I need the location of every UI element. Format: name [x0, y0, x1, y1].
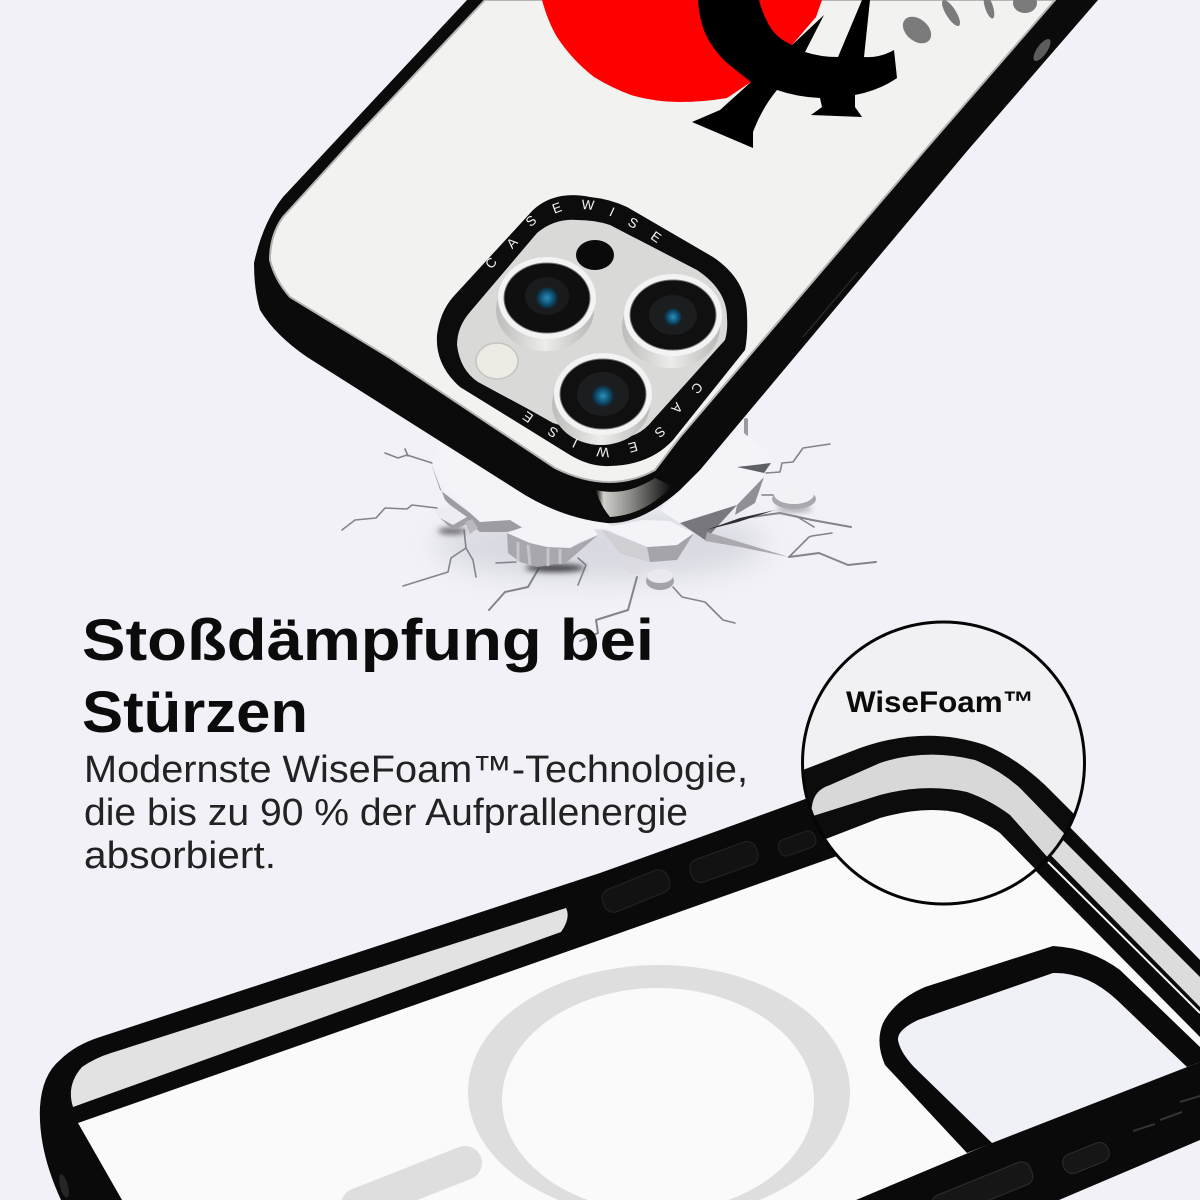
rock: left chunk [507, 527, 598, 572]
black figure artwork [692, 0, 897, 148]
CASEWISE lettering lower: E [627, 439, 639, 455]
CASEWISE lettering upper: S [625, 214, 641, 232]
lens top left [496, 257, 596, 351]
CASEWISE lettering lower: A [668, 400, 686, 416]
CASEWISE lettering lower: C [688, 379, 706, 397]
crack lines [342, 420, 876, 641]
case outer frame [254, 0, 1098, 523]
soft ground shadow [435, 509, 765, 581]
CASEWISE lettering lower [520, 379, 706, 460]
magnifier callout: WiseFoam [801, 620, 1086, 906]
right slab [660, 430, 789, 557]
magsafe alignment pill [358, 1163, 465, 1200]
bottom side buttons [929, 1140, 1112, 1200]
heading: Stürzen [82, 680, 308, 745]
CASEWISE lettering upper [482, 197, 664, 272]
foam strip right [1030, 817, 1200, 1007]
body text [84, 749, 748, 877]
black frame silhouette [40, 745, 1200, 1200]
camera cutout opening [898, 973, 1187, 1143]
lens right [622, 274, 722, 368]
microphone hole [576, 240, 614, 270]
CASEWISE lettering upper: E [550, 199, 564, 217]
CASEWISE lettering lower: W [596, 444, 610, 460]
CASEWISE lettering lower: S [652, 423, 668, 441]
rock: small left [435, 505, 478, 534]
left cliff [431, 463, 523, 532]
rock: bottom small [624, 563, 674, 590]
bumper texture [1133, 1096, 1200, 1131]
callout label: WiseFoam™ [846, 686, 1034, 719]
white back panel [270, 0, 1055, 482]
magnifier background [802, 622, 1084, 904]
CASEWISE lettering upper: S [523, 212, 539, 230]
white highlight beside foam [1048, 862, 1200, 1013]
CASEWISE lettering lower: S [545, 423, 561, 441]
CASEWISE lettering upper: C [482, 254, 500, 272]
CASEWISE lettering upper: A [503, 235, 521, 251]
grey pebbles [898, 0, 1037, 49]
body text: Modernste WiseFoam™-Technologie, [84, 749, 748, 791]
body text: die bis zu 90 % der Aufprallenergie [84, 792, 688, 834]
rock: right floating [772, 484, 816, 512]
magnified frame detail [804, 736, 1074, 868]
camera island [437, 195, 747, 466]
CASEWISE lettering upper: E [648, 228, 664, 246]
CASEWISE lettering lower: I [570, 435, 580, 451]
clear back panel [78, 820, 1200, 1200]
clear case interior view [40, 745, 1200, 1200]
red circle artwork [542, 0, 822, 102]
left slab top [432, 440, 620, 530]
CASEWISE lettering upper: W [581, 197, 595, 213]
CASEWISE lettering lower: E [520, 408, 536, 426]
island black bumper [437, 195, 747, 466]
magsafe ring [468, 965, 850, 1200]
magnifier ring [802, 622, 1084, 904]
body text: absorbiert. [84, 835, 276, 877]
camera cutout frame [879, 946, 1200, 1153]
CASEWISE lettering upper: I [607, 204, 617, 220]
corner reflection [596, 478, 672, 517]
rock: middle chunk [602, 520, 694, 562]
phone in case falling [254, 0, 1098, 523]
lens bottom [552, 353, 652, 445]
charging port hole [57, 1173, 71, 1199]
side slot line [803, 272, 858, 337]
foam strip left [71, 908, 568, 1107]
heading [82, 608, 654, 745]
top side buttons [599, 829, 818, 915]
impact cracks in the ground [342, 420, 876, 641]
flash [476, 343, 518, 379]
heading: Stoßdämpfung bei [82, 608, 654, 673]
side button highlight [1030, 36, 1054, 64]
island silver plate [457, 220, 727, 438]
